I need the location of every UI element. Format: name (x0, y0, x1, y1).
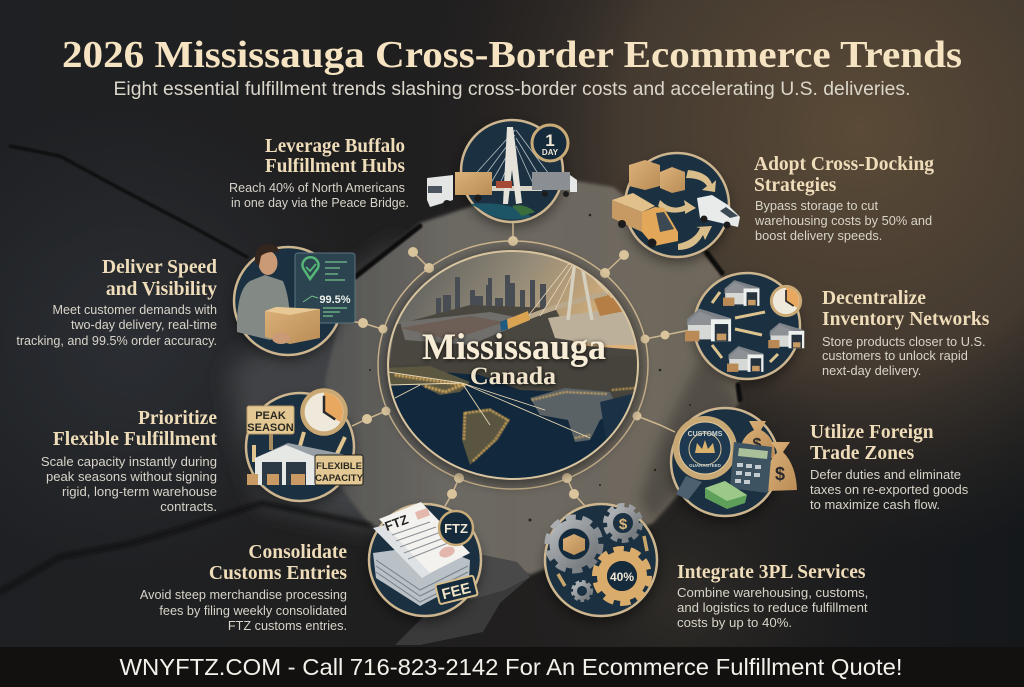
text: Utilize Foreign Trade Zones: to maximize cash flow. (810, 497, 940, 512)
text: Utilize Foreign Trade Zones: Trade Zones (810, 443, 915, 464)
text: Decentralize Inventory Networks: Store products closer to U.S. (822, 334, 986, 349)
icon: Peak season warehouse, clock and signs: SEASON (247, 422, 294, 434)
icon: Peak season warehouse, clock and signs: CAPACITY (315, 473, 364, 484)
text: Leverage Buffalo Fulfillment Hubs: Leverage Buffalo (265, 136, 405, 157)
footer call-to-action bar: WNYFTZ.COM - Call 716-823-2142 For An Ecommerce Fulfillment Quote! (120, 654, 902, 680)
text: Consolidate Customs Entries (140, 542, 347, 633)
text: Decentralize Inventory Networks (822, 288, 990, 378)
icon: 3PL gears (545, 504, 657, 616)
icon: Peak season warehouse, clock and signs: FLEXIBLE (316, 461, 362, 472)
icon: FTZ customs papers and FEE label: FEE (440, 580, 473, 603)
text: Consolidate Customs Entries: FTZ customs entries. (228, 619, 347, 633)
icon: delivery person with dashboard: 99.5% (319, 294, 351, 306)
text: Prioritize Flexible Fulfillment: Scale capacity instantly during (41, 454, 217, 469)
text: Consolidate Customs Entries: Consolidate (248, 542, 347, 563)
text: Integrate 3PL Services: and logistics to reduce fulfillment (677, 600, 868, 615)
text: Leverage Buffalo Fulfillment Hubs: Fulfillment Hubs (265, 156, 405, 177)
icon: Foreign trade zone badge, money and calculator: CUSTOMS (688, 431, 723, 438)
icon: Peak season warehouse, clock and signs (246, 388, 364, 501)
text: Deliver Speed and Visibility: tracking, and 99.5% order accuracy. (16, 334, 217, 348)
icon: Foreign trade zone badge, money and calculator: $ (753, 436, 762, 453)
text: Consolidate Customs Entries: fees by filing weekly consolidated (159, 604, 347, 618)
text: Utilize Foreign Trade Zones (810, 422, 969, 512)
icon: 3PL gears: $ (619, 516, 628, 533)
icon: FTZ customs papers and FEE label (369, 502, 481, 616)
text: Leverage Buffalo Fulfillment Hubs (229, 136, 409, 210)
central globe: Mississauga Canada (385, 243, 641, 485)
icon: Foreign trade zone badge, money and calculator: $ (775, 464, 785, 484)
text: Adopt Cross-Docking Strategies: warehousing costs by 50% and (754, 213, 932, 228)
text: Decentralize Inventory Networks: next-day delivery. (822, 363, 921, 378)
text: Prioritize Flexible Fulfillment: Flexible Fulfillment (53, 429, 217, 450)
icon: 3PL gears: 40% (610, 570, 634, 584)
icon: Peak season warehouse, clock and signs: PEAK (255, 410, 286, 422)
central label: Mississauga (422, 327, 606, 368)
icon: Foreign trade zone badge, money and calculator: GUARANTEED (689, 463, 722, 468)
subtitle: Eight essential fulfillment trends slashing cross-border costs and accelerating U.S. deliveries. (114, 78, 910, 100)
icon: FTZ customs papers and FEE label: FTZ (383, 512, 410, 534)
text: Adopt Cross-Docking Strategies: Strategies (754, 175, 837, 196)
text: Adopt Cross-Docking Strategies: boost delivery speeds. (755, 228, 882, 243)
text: Integrate 3PL Services (677, 562, 868, 630)
text: Integrate 3PL Services: Combine warehousing, customs, (677, 585, 868, 600)
text: Decentralize Inventory Networks: customers to unlock rapid (822, 348, 968, 363)
icon: Buffalo bridge and trucks: 1 (545, 131, 555, 150)
text: Deliver Speed and Visibility: Meet customer demands with (52, 303, 217, 317)
text: Consolidate Customs Entries: Customs Entries (209, 563, 347, 584)
text: Deliver Speed and Visibility: two-day delivery, real-time (71, 318, 217, 332)
text: Adopt Cross-Docking Strategies (754, 154, 934, 243)
text: Consolidate Customs Entries: Avoid steep merchandise processing (140, 588, 347, 602)
connectors (340, 222, 690, 506)
icon: Cross-docking boxes and vehicles (612, 153, 740, 257)
text: Utilize Foreign Trade Zones: taxes on re-exported goods (810, 482, 969, 497)
title: 2026 Mississauga Cross-Border Ecommerce Trends (62, 34, 962, 76)
text: Leverage Buffalo Fulfillment Hubs: in one day via the Peace Bridge. (231, 196, 409, 210)
connector nodes (358, 236, 670, 499)
text: Leverage Buffalo Fulfillment Hubs: Reach 40% of North Americans (229, 181, 405, 195)
icon: Foreign trade zone badge, money and calculator (671, 408, 797, 516)
footer call-to-action bar (0, 647, 1024, 687)
central label: Canada (470, 363, 557, 390)
icon: FTZ customs papers and FEE label: FTZ (444, 521, 468, 536)
text: Prioritize Flexible Fulfillment: Prioritize (138, 408, 217, 429)
text: Adopt Cross-Docking Strategies: Bypass storage to cut (755, 198, 879, 213)
text: Utilize Foreign Trade Zones: Utilize Foreign (810, 422, 934, 443)
text: Integrate 3PL Services: costs by up to 40%. (677, 615, 792, 630)
text: Utilize Foreign Trade Zones: Defer duties and eliminate (810, 467, 961, 482)
text: Integrate 3PL Services: Integrate 3PL Services (677, 562, 866, 583)
text: Deliver Speed and Visibility: and Visibility (106, 279, 217, 300)
icon: Decentralized warehouses (685, 273, 804, 379)
text: Prioritize Flexible Fulfillment (41, 408, 217, 514)
icon: Buffalo bridge and trucks (427, 120, 577, 222)
icon: Buffalo bridge and trucks: DAY (542, 148, 559, 157)
text: Adopt Cross-Docking Strategies: Adopt Cross-Docking (754, 154, 934, 175)
central label (422, 327, 606, 390)
text: Prioritize Flexible Fulfillment: peak seasons without signing (46, 469, 217, 484)
text: Deliver Speed and Visibility: Deliver Speed (102, 257, 217, 278)
text: Prioritize Flexible Fulfillment: rigid, long-term warehouse (62, 484, 217, 499)
text: Deliver Speed and Visibility (16, 257, 217, 348)
text: Decentralize Inventory Networks: Inventory Networks (822, 309, 990, 330)
icon: delivery person with dashboard (234, 244, 355, 355)
text: Prioritize Flexible Fulfillment: contracts. (160, 499, 217, 514)
text: Decentralize Inventory Networks: Decentralize (822, 288, 926, 309)
